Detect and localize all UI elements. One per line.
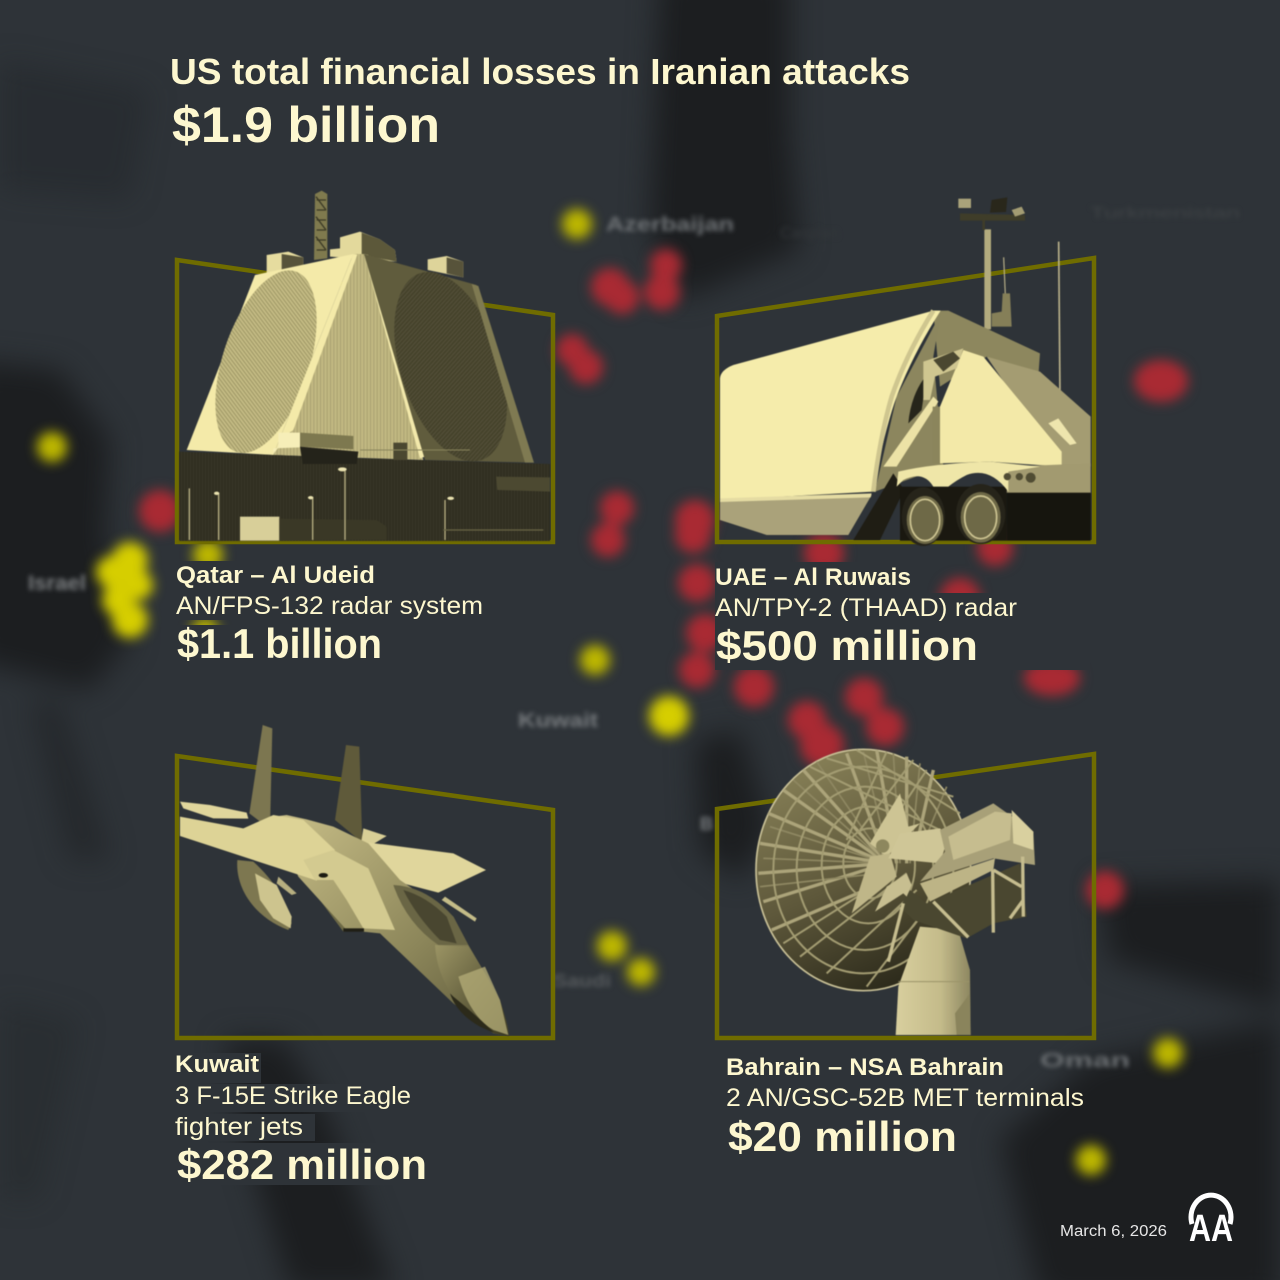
panel: Bahrain NSA [717,749,1094,1160]
photo: F-15E fighter jet [180,725,509,1036]
frame [177,260,553,542]
icon: AA logo [1189,1195,1233,1250]
yellow strike markers [37,209,1183,1175]
caption: Kuwait: 3 F-15E Strike Eagle [175,1082,411,1110]
total amount: $1.9 billion [172,97,440,153]
caption: UAE: AN/TPY-2 (THAAD) radar [715,594,1017,622]
map place labels: Oman [1040,1050,1130,1072]
caption: Bahrain: Bahrain – NSA Bahrain [726,1054,1004,1081]
caption: Kuwait: fighter jets [175,1113,303,1141]
caption: Qatar: $1.1 billion [177,620,382,667]
map place labels: Israel [28,572,86,595]
caption: Kuwait: $282 million [177,1141,427,1188]
photo: AN/FPS-132 radar building [179,191,550,541]
map place labels: Caspian [780,225,839,242]
date: March 6, 2026 [1060,1223,1167,1240]
caption: Kuwait: Kuwait [175,1051,259,1078]
caption: Qatar: Qatar – Al Udeid [176,562,375,589]
bright yellow markers [96,542,689,736]
caption: UAE: $500 million [716,622,978,669]
red strike markers [139,249,1188,909]
map place labels: Turkmenistan [1090,205,1240,222]
caption: Qatar: AN/FPS-132 radar system [176,592,483,620]
photo: satellite dish terminal [756,749,1035,1035]
frame [717,754,1094,1038]
photo: AN/TPY-2 THAAD radar [720,197,1091,546]
caption: Kuwait [175,1051,429,1188]
caption: Qatar [176,561,485,667]
map place labels: Kuwait [518,710,598,732]
icon: AA logo: AA [1189,1208,1233,1250]
caption: UAE: UAE – Al Ruwais [715,564,911,591]
frame [717,258,1094,542]
map place labels: Azerbaijan [606,214,734,236]
caption: Bahrain [726,1054,1084,1160]
map place labels: B [700,814,713,834]
frame [177,756,553,1038]
caption: UAE [715,562,1090,670]
panel: UAE Al Ruwais radar [715,197,1094,670]
panel: Qatar Al Udeid radar [176,191,553,667]
caption: Bahrain: $20 million [728,1113,957,1160]
title [170,51,910,153]
panel: Kuwait F-15E [175,725,553,1188]
caption: Bahrain: 2 AN/GSC-52B MET terminals [726,1084,1084,1112]
map place labels: Saudi [553,971,611,991]
title: US total financial losses in Iranian attacks [170,51,910,92]
map place labels [28,205,1240,1072]
